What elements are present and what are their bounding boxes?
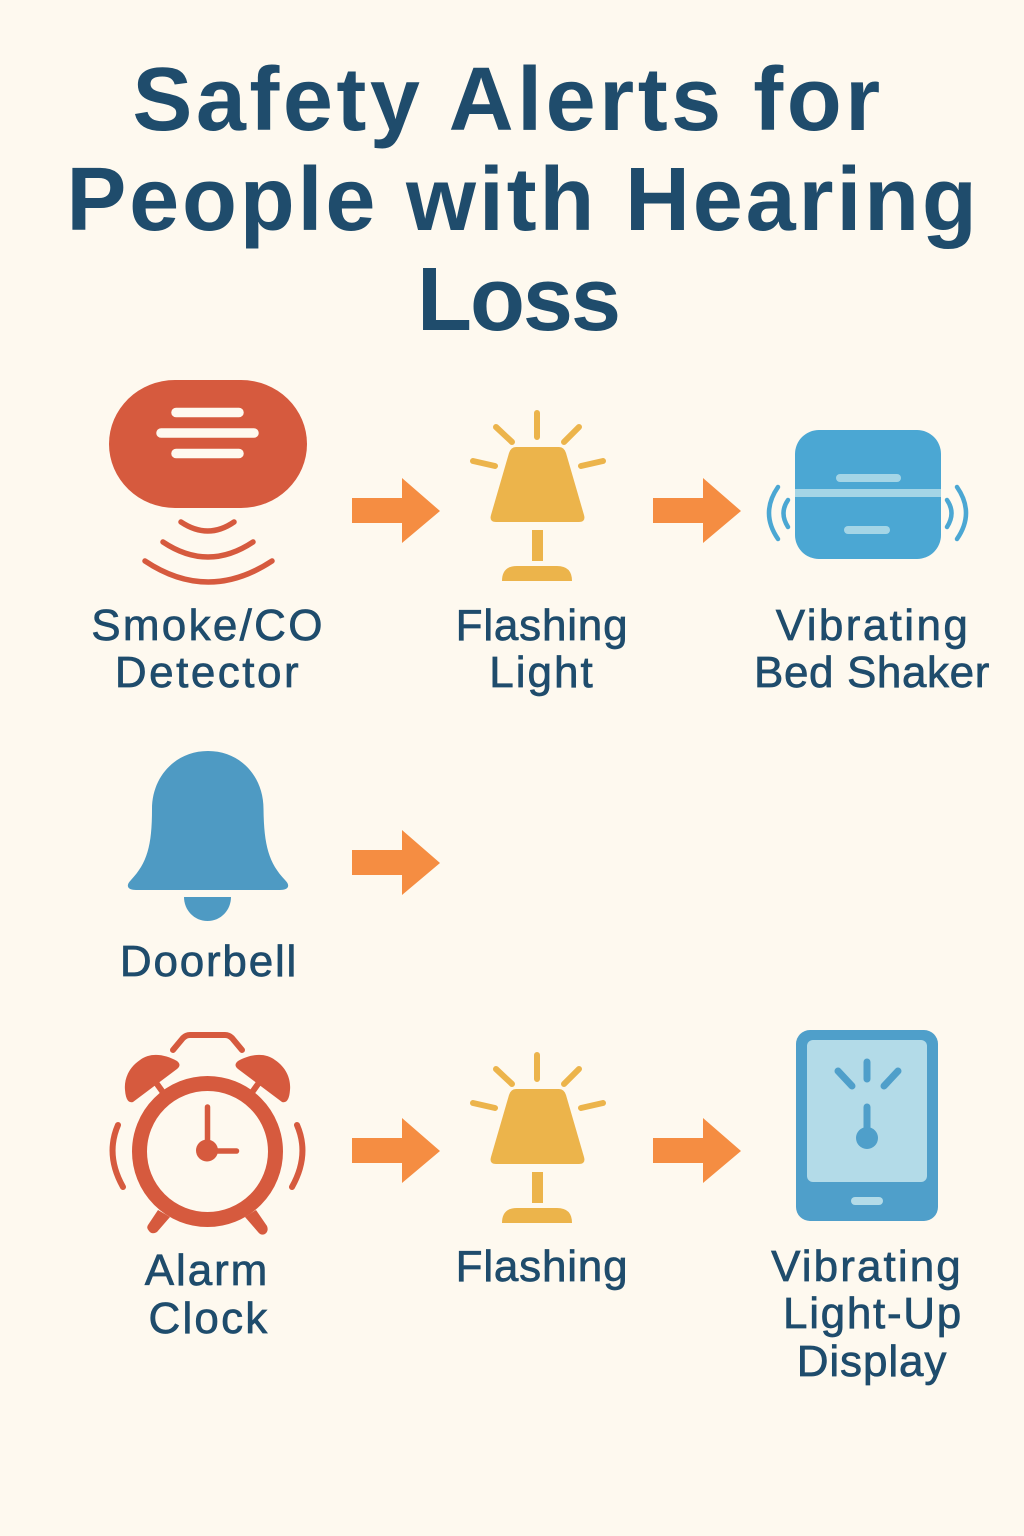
- label: alarm clock: Alarm: [145, 1246, 269, 1295]
- icon: light-up display: [796, 1030, 938, 1221]
- icon: doorbell: [128, 751, 288, 921]
- label: bed shaker: [754, 600, 990, 697]
- title: People with Hearing: [66, 150, 980, 250]
- label: bed shaker: Bed Shaker: [754, 648, 990, 697]
- label: flashing light: Light: [489, 648, 595, 697]
- icon: flashing light 2: [473, 1055, 603, 1223]
- icon: smoke detector: [109, 380, 307, 582]
- label: light-up display: Display: [797, 1336, 947, 1386]
- icon: bed shaker: [769, 430, 966, 559]
- label: light-up display: [770, 1242, 963, 1386]
- icon: alarm clock: [113, 1035, 302, 1235]
- label: flashing light: Flashing: [456, 600, 628, 650]
- title: Loss: [417, 250, 619, 350]
- label: doorbell: Doorbell: [120, 937, 298, 986]
- icon: flashing light: [473, 413, 603, 581]
- label: light-up display: Vibrating: [771, 1242, 963, 1290]
- arrow 3: [352, 830, 440, 895]
- label: alarm clock: [144, 1246, 270, 1342]
- label: flashing light: [456, 600, 628, 697]
- arrow 4: [352, 1118, 440, 1183]
- arrow 1: [352, 478, 440, 543]
- label: flashing: Flashing: [456, 1242, 628, 1290]
- arrow 2: [653, 478, 741, 543]
- arrow 5: [653, 1118, 741, 1183]
- label: smoke detector: Smoke/CO: [91, 600, 325, 650]
- label: light-up display: Light-Up: [783, 1289, 963, 1338]
- title: Safety Alerts for: [132, 50, 884, 150]
- label: smoke detector: [91, 600, 325, 697]
- label: alarm clock: Clock: [148, 1294, 270, 1342]
- label: bed shaker: Vibrating: [776, 600, 970, 650]
- label: smoke detector: Detector: [115, 648, 301, 697]
- title: [66, 50, 980, 350]
